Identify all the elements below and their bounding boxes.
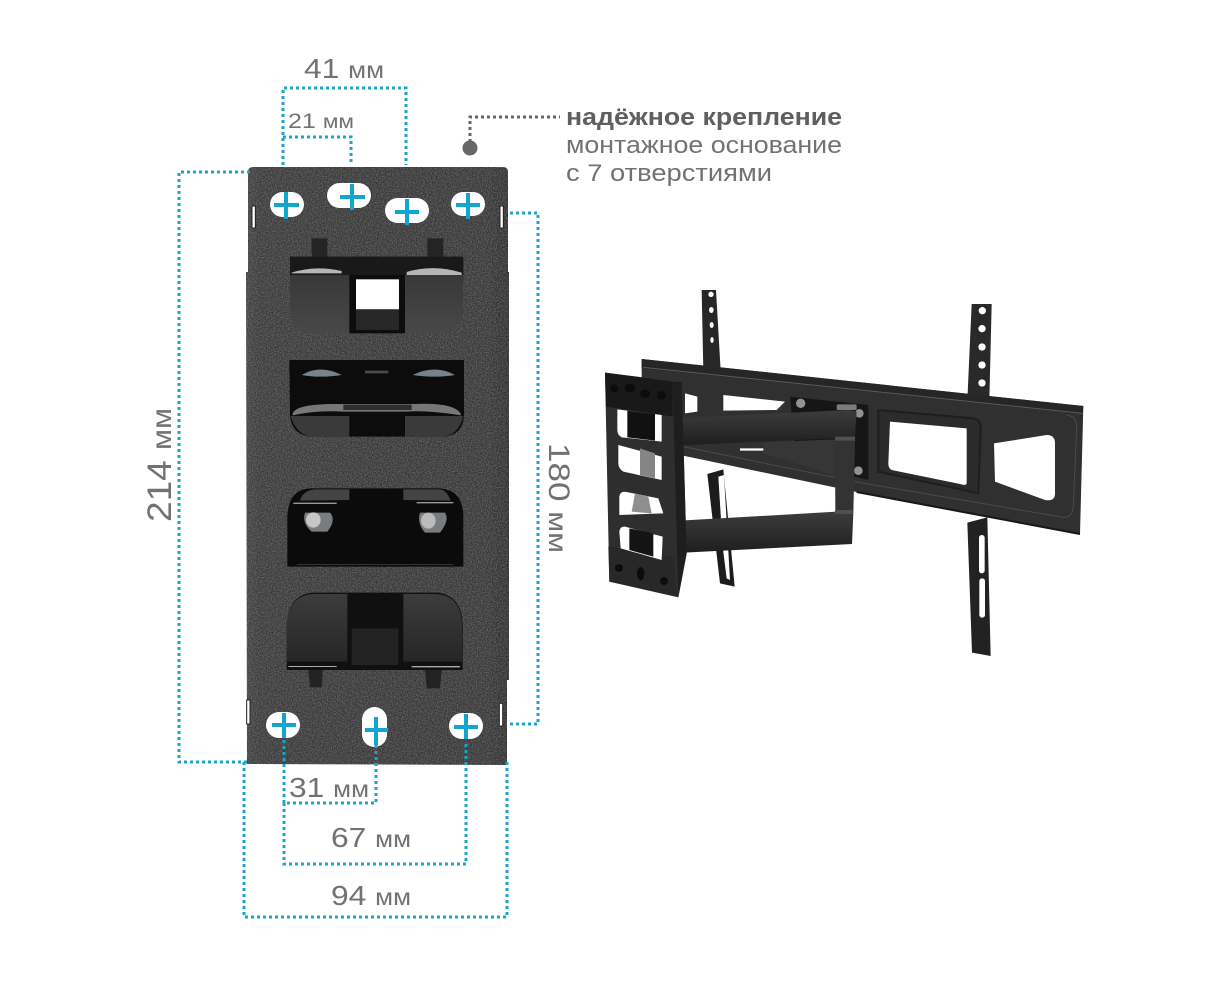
mounting holes <box>266 183 485 747</box>
214 mm bracket <box>179 172 250 762</box>
callout description line 1: монтажное основание <box>566 132 842 159</box>
side notches <box>247 700 503 726</box>
label 214 mm: 214 мм <box>141 408 179 522</box>
dimension lines <box>179 88 538 917</box>
plate holes <box>610 384 668 585</box>
callout text <box>566 104 842 187</box>
rail opening left <box>723 395 785 451</box>
21 mm bracket <box>283 137 351 165</box>
rail opening middle <box>878 410 981 493</box>
elbow joint <box>835 404 857 514</box>
rail opening right <box>994 435 1055 500</box>
arm carriage plate <box>605 373 687 597</box>
window 3 <box>287 488 463 567</box>
upper right strap <box>967 304 992 401</box>
label 41 mm: 41 мм <box>304 53 384 84</box>
side notches <box>252 206 503 228</box>
31 mm bracket <box>284 740 376 803</box>
hole centre crosses <box>272 184 480 745</box>
label 180 mm: 180 мм <box>542 443 575 553</box>
hinge block <box>790 397 868 480</box>
plate openings <box>617 409 662 442</box>
41 mm bracket <box>283 88 406 165</box>
window 1 <box>290 238 463 333</box>
label 31 mm: 31 мм <box>289 772 369 803</box>
lower swing arm <box>680 512 853 553</box>
label 67 mm: 67 мм <box>331 822 411 853</box>
lower right strap <box>967 517 991 656</box>
long mounting rail <box>642 359 1083 534</box>
callout description line 2: с 7 отверстиями <box>566 160 772 187</box>
67 mm bracket <box>284 742 466 864</box>
callout pointer <box>462 117 560 156</box>
panel: mounting plate close-up <box>246 167 509 765</box>
window 4 <box>287 593 463 688</box>
product photo: TV wall mount on articulating arm <box>605 290 1083 656</box>
lower left strap <box>707 469 735 587</box>
label 21 mm: 21 мм <box>288 110 354 133</box>
label 94 mm: 94 мм <box>331 880 411 911</box>
180 mm bracket <box>510 213 538 724</box>
upper plate details <box>252 206 503 437</box>
callout heading: надёжное крепление <box>566 104 842 131</box>
lower plate details <box>247 488 503 726</box>
plate body <box>246 167 509 765</box>
window 2 <box>289 360 464 437</box>
upper swing arm <box>673 410 857 446</box>
upper left strap <box>702 290 721 371</box>
94 mm bracket <box>244 762 507 917</box>
dimension labels <box>141 53 575 911</box>
